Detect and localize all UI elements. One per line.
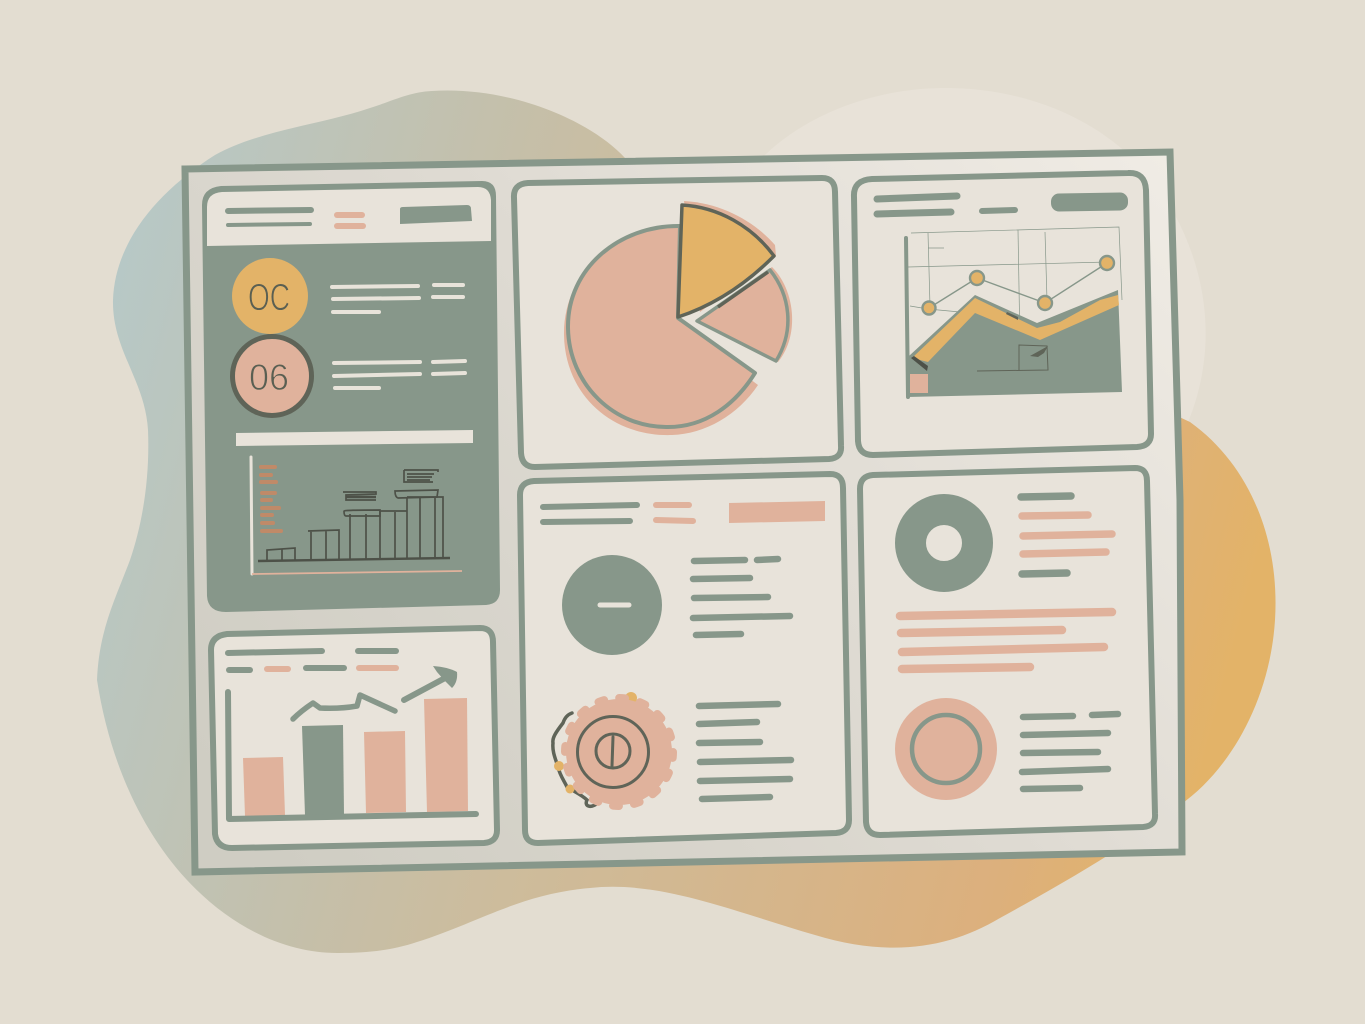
background cream blob: [760, 88, 1206, 440]
data line: [929, 263, 1107, 308]
large pie slice: [568, 226, 755, 427]
header lines: [877, 196, 1015, 214]
gear body: [566, 699, 672, 805]
orange band: [912, 295, 1119, 362]
header button: [400, 205, 472, 224]
panel: list with dark body: [202, 181, 500, 612]
gear rings: [578, 716, 648, 788]
pink header button: [729, 501, 825, 523]
panel: donut and rings: [860, 468, 1155, 835]
circle dash: [600, 602, 629, 608]
header lines: [543, 505, 637, 522]
small box: [977, 345, 1048, 371]
trend line: [293, 695, 395, 719]
header button: [1051, 192, 1128, 212]
pink header lines: [656, 505, 693, 521]
ring gauge: [895, 698, 997, 800]
pie shadow: [564, 229, 758, 435]
divider band: [236, 430, 473, 446]
orange slice shadow: [684, 201, 776, 312]
sage circle: [562, 555, 662, 655]
header pink lines: [337, 215, 363, 226]
panel header: [207, 187, 491, 246]
bars: [243, 757, 285, 816]
panel body: [202, 181, 500, 612]
badge: OC: OC: [248, 277, 290, 319]
pink marker square: [910, 374, 928, 393]
text lines 2: [699, 704, 791, 799]
pink paragraph lines: [900, 612, 1112, 669]
bars: [258, 470, 450, 561]
mini bar chart: [251, 457, 462, 574]
badge: 06: [232, 336, 312, 416]
gear icon: [553, 692, 673, 806]
panel frame: [514, 178, 841, 467]
axes: [228, 692, 476, 819]
area under curve: [907, 290, 1122, 397]
value ticks: [261, 467, 281, 531]
panel: central metrics: [520, 474, 849, 843]
chart axes: [251, 457, 252, 574]
bottom text lines: [1022, 714, 1118, 789]
panel frame: [520, 474, 849, 843]
header lines: [228, 210, 311, 225]
panel frame: [860, 468, 1155, 835]
trend arrow: [404, 666, 457, 700]
list lines 1: [332, 285, 463, 312]
grid: [908, 227, 1122, 345]
header lines: [228, 651, 396, 670]
background gradient blob: [97, 91, 1276, 953]
orange pie slice: [678, 205, 774, 317]
list lines 2: [334, 361, 465, 388]
panel: line and area chart: [854, 173, 1151, 455]
dark edge of small slice: [718, 272, 768, 307]
badge: 06: 06: [249, 357, 289, 398]
text lines 1: [693, 559, 790, 635]
donut chart: [910, 510, 978, 576]
badge: OC: [232, 258, 308, 334]
small slice shadow: [700, 267, 792, 362]
panel frame: [211, 628, 497, 848]
data points: [922, 256, 1114, 314]
panel frame: [854, 173, 1151, 455]
gear back details: [553, 713, 598, 806]
panel: bar chart with trend: [211, 628, 497, 848]
small pie slice: [697, 270, 788, 361]
dashboard board: [185, 152, 1182, 872]
panel: pie chart: [514, 178, 841, 467]
band shadow accent: [911, 356, 928, 371]
top text lines: [1021, 496, 1112, 574]
y axis: [906, 238, 908, 397]
